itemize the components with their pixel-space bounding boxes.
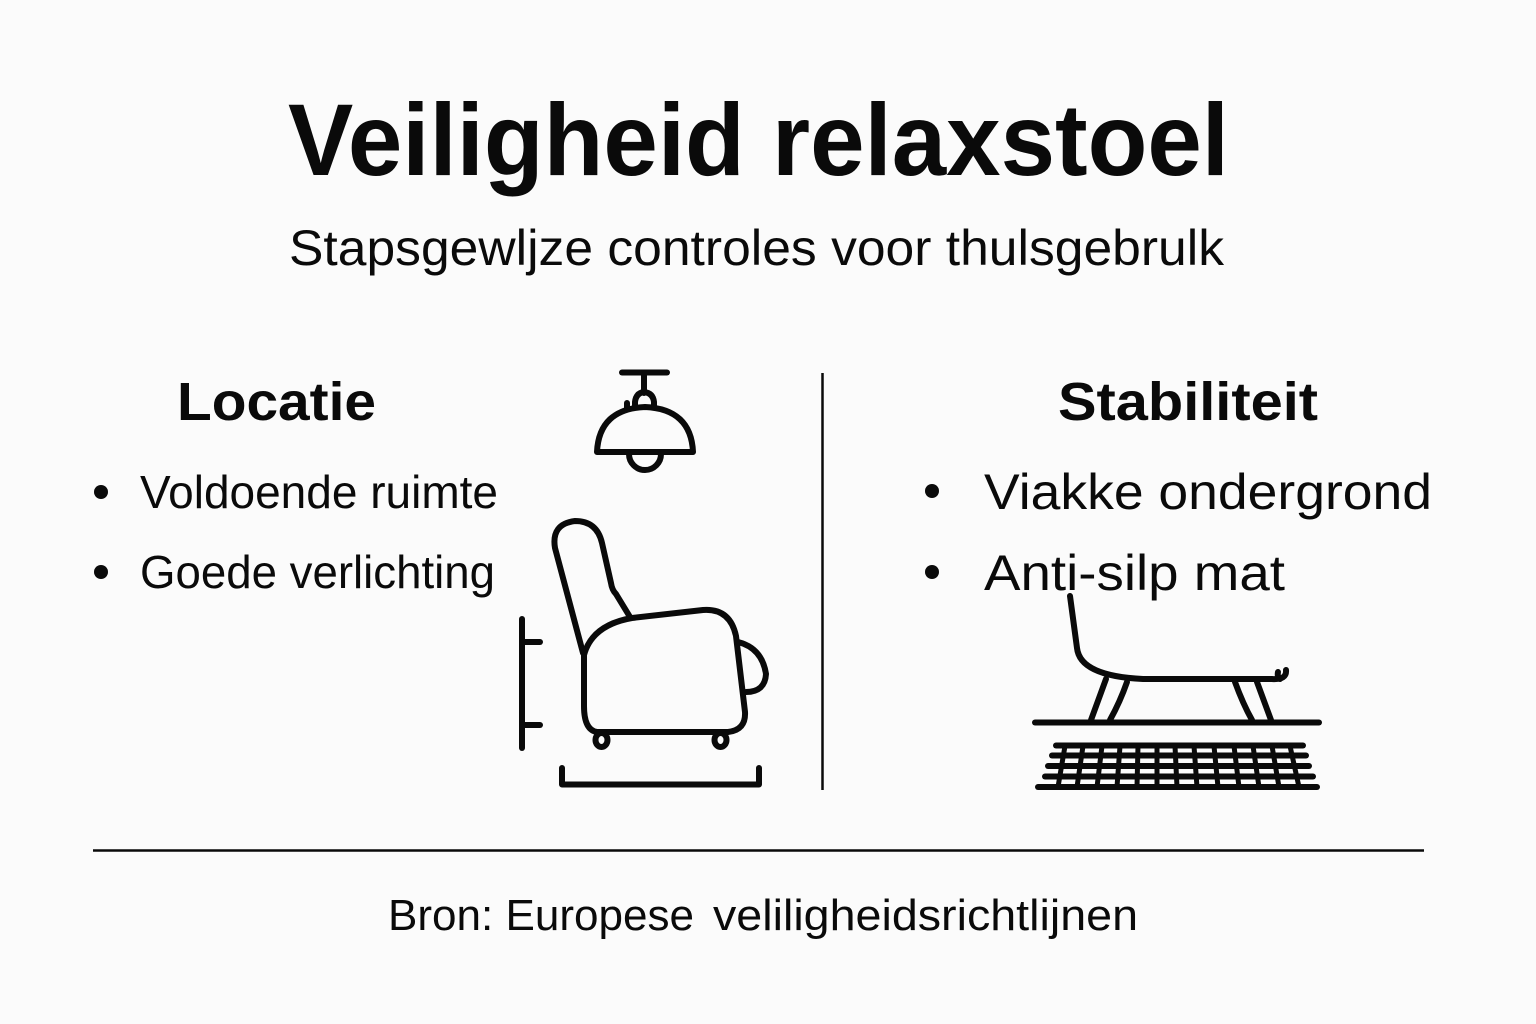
source note	[388, 891, 1138, 940]
source note: Bron: Europese	[388, 891, 694, 940]
bullet list: locatie	[94, 466, 498, 598]
vertical divider	[821, 373, 824, 790]
icon: floor clearance bracket	[562, 768, 759, 784]
source note: veliligheidsrichtlijnen	[713, 891, 1138, 940]
icon: recliner chair	[554, 521, 766, 747]
icon: anti-slip mat	[1038, 746, 1317, 787]
horizontal divider	[93, 849, 1424, 852]
bullet list: locatie: Voldoende ruimte	[140, 466, 498, 518]
bullet list: stabiliteit	[925, 464, 1432, 601]
subtitle: Stapsgewljze controles voor thulsgebrulk	[289, 220, 1225, 276]
panel: locatie	[94, 372, 766, 784]
title: Veiligheid relaxstoel	[288, 83, 1229, 197]
icon: ceiling lamp	[597, 372, 693, 470]
panel: stabiliteit	[925, 372, 1432, 787]
bullet list: locatie: Goede verlichting	[140, 546, 495, 598]
icon: wall clearance marker	[522, 619, 540, 748]
heading: stabiliteit: Stabiliteit	[1058, 372, 1318, 432]
bullet list: stabiliteit: Viakke ondergrond	[984, 464, 1432, 520]
heading: locatie: Locatie	[177, 372, 376, 432]
bullet list: stabiliteit: Anti-silp mat	[984, 545, 1285, 601]
icon: chair on level floor	[1035, 596, 1319, 722]
